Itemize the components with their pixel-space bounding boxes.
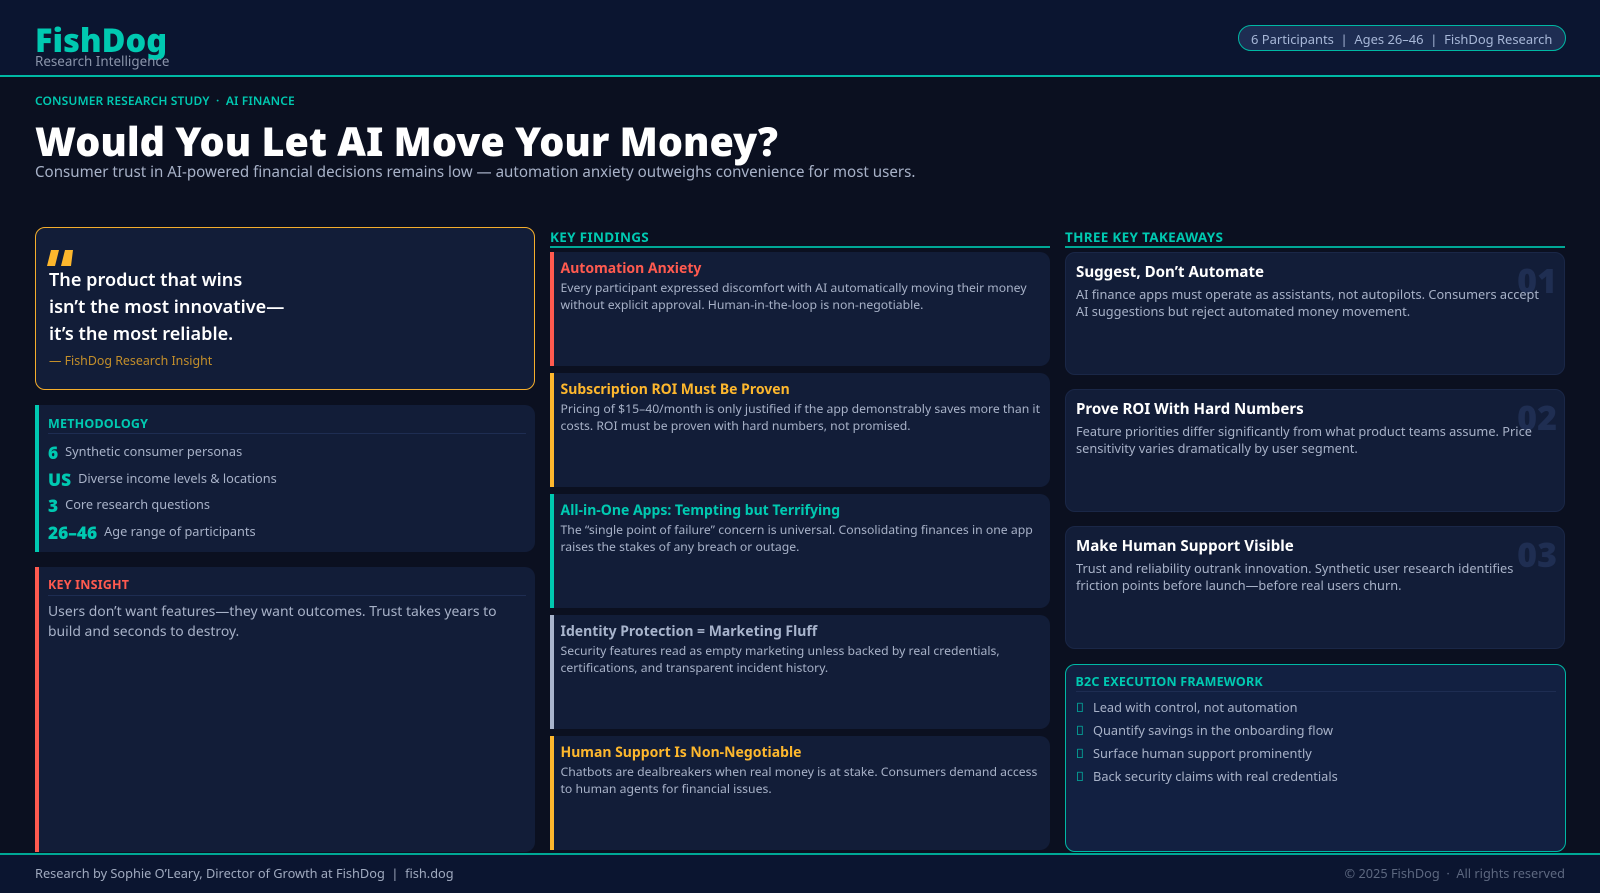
finding: human support: Human Support Is Non-Negotiable	[560, 743, 802, 762]
finding: human support: to human agents for financial issues.	[560, 780, 772, 797]
takeaway 03: Make Human Support Visible	[1076, 536, 1294, 556]
methodology heading: METHODOLOGY	[48, 415, 148, 432]
takeaway 01: 01	[1517, 257, 1557, 303]
stat: personas: 6 Synthetic consumer personas	[48, 442, 242, 465]
finding: identity protection	[550, 615, 1050, 729]
heading: key findings: KEY FINDINGS	[550, 228, 649, 246]
takeaway 02: sensitivity varies dramatically by user segment.	[1076, 439, 1358, 457]
framework item 1: Lead with control, not automation	[1093, 698, 1298, 716]
finding: automation anxiety: without explicit approval. Human-in-the-loop is non-negotiable.	[560, 296, 923, 313]
takeaway 01	[1065, 252, 1565, 375]
key insight text	[48, 602, 497, 641]
logo: Research Intelligence	[35, 52, 169, 70]
takeaway 02	[1065, 389, 1565, 512]
header bar	[0, 0, 1600, 77]
footer credit: Research by Sophie O’Leary, Director of Growth at FishDog | fish.dog	[35, 864, 454, 882]
finding: automation anxiety: Every participant expressed discomfort with AI automatically moving their money	[560, 279, 1027, 296]
heading: three key takeaways	[1065, 227, 1565, 248]
finding: identity protection: Identity Protection = Marketing Fluff	[560, 622, 817, 641]
heading: three key takeaways: THREE KEY TAKEAWAYS	[1065, 228, 1223, 246]
finding: identity protection: certifications, and transparent incident history.	[560, 659, 828, 676]
participants badge: 6 Participants | Ages 26–46 | FishDog Research	[1251, 30, 1552, 48]
finding: identity protection: Security features read as empty marketing unless backed by real credentials,	[560, 642, 1000, 659]
quote text: it’s the most reliable.	[49, 322, 233, 346]
quote attribution: — FishDog Research Insight	[49, 352, 212, 369]
finding: subscription ROI: Subscription ROI Must Be Proven	[560, 380, 790, 399]
takeaway 03: Trust and reliability outrank innovation. Synthetic user research identifies	[1076, 559, 1513, 577]
takeaway 03: friction points before launch—before real users churn.	[1076, 576, 1402, 594]
quote text: The product that wins	[49, 268, 242, 292]
finding: subscription ROI: costs. ROI must be proven with hard numbers, not promised.	[560, 417, 911, 434]
finding: human support	[550, 736, 1050, 850]
title: Would You Let AI Move Your Money?	[35, 114, 778, 168]
framework item 4: 	[1076, 767, 1084, 785]
participants badge	[1238, 25, 1566, 51]
framework item 2: 	[1076, 721, 1084, 739]
takeaway 03	[1065, 526, 1565, 649]
finding: subscription ROI: Pricing of $15–40/month is only justified if the app demonstrably saves more than it	[560, 400, 1040, 417]
panel: B2C execution framework	[1065, 664, 1566, 852]
key insight heading: KEY INSIGHT	[48, 576, 129, 593]
takeaway 01: AI finance apps must operate as assistants, not autopilots. Consumers accept	[1076, 285, 1539, 303]
finding: subscription ROI	[550, 373, 1050, 487]
framework heading: B2C EXECUTION FRAMEWORK	[1076, 673, 1263, 690]
logo: FishDog	[35, 17, 167, 62]
finding: all-in-one apps	[550, 494, 1050, 608]
footer copyright: © 2025 FishDog · All rights reserved	[1345, 864, 1565, 882]
key insight text: build and seconds to destroy.	[48, 622, 239, 641]
quote text	[49, 268, 284, 346]
heading: key findings	[550, 227, 1050, 248]
framework item 3: 	[1076, 744, 1084, 762]
panel: methodology	[35, 405, 535, 552]
framework item 4: Back security claims with real credentials	[1093, 767, 1338, 785]
key insight text: Users don’t want features—they want outcomes. Trust takes years to	[48, 602, 497, 621]
takeaway 01: AI suggestions but reject automated money movement.	[1076, 302, 1410, 320]
stat: locations: US Diverse income levels & locations	[48, 469, 277, 492]
finding: all-in-one apps: raises the stakes of any breach or outage.	[560, 538, 799, 555]
finding: human support: Chatbots are dealbreakers when real money is at stake. Consumers demand access	[560, 763, 1037, 780]
finding: automation anxiety	[550, 252, 1050, 366]
takeaway 02: Feature priorities differ significantly from what product teams assume. Price	[1076, 422, 1532, 440]
stat: age range: 26–46 Age range of participants	[48, 522, 256, 545]
quote text: isn’t the most innovative—	[49, 295, 284, 319]
footer	[0, 853, 1600, 893]
eyebrow: CONSUMER RESEARCH STUDY · AI FINANCE	[35, 92, 295, 109]
panel: key insight	[35, 567, 535, 852]
finding: automation anxiety: Automation Anxiety	[560, 259, 701, 278]
framework item 2: Quantify savings in the onboarding flow	[1093, 721, 1333, 739]
framework item 3: Surface human support prominently	[1093, 744, 1312, 762]
finding: all-in-one apps: All-in-One Apps: Tempting but Terrifying	[560, 501, 840, 520]
finding: all-in-one apps: The “single point of failure” concern is universal. Consolidating finances in one app	[560, 521, 1033, 538]
stat: questions: 3 Core research questions	[48, 495, 210, 518]
takeaway 01: Suggest, Don’t Automate	[1076, 262, 1264, 282]
takeaway 02: 02	[1517, 394, 1557, 440]
panel: quote	[35, 227, 535, 390]
framework item 1: 	[1076, 698, 1084, 716]
icon: quote mark	[47, 250, 73, 266]
takeaway 03: 03	[1517, 531, 1557, 577]
takeaway 02: Prove ROI With Hard Numbers	[1076, 399, 1304, 419]
subtitle: Consumer trust in AI-powered financial decisions remains low — automation anxiety outweighs convenience for most users.	[35, 162, 915, 182]
